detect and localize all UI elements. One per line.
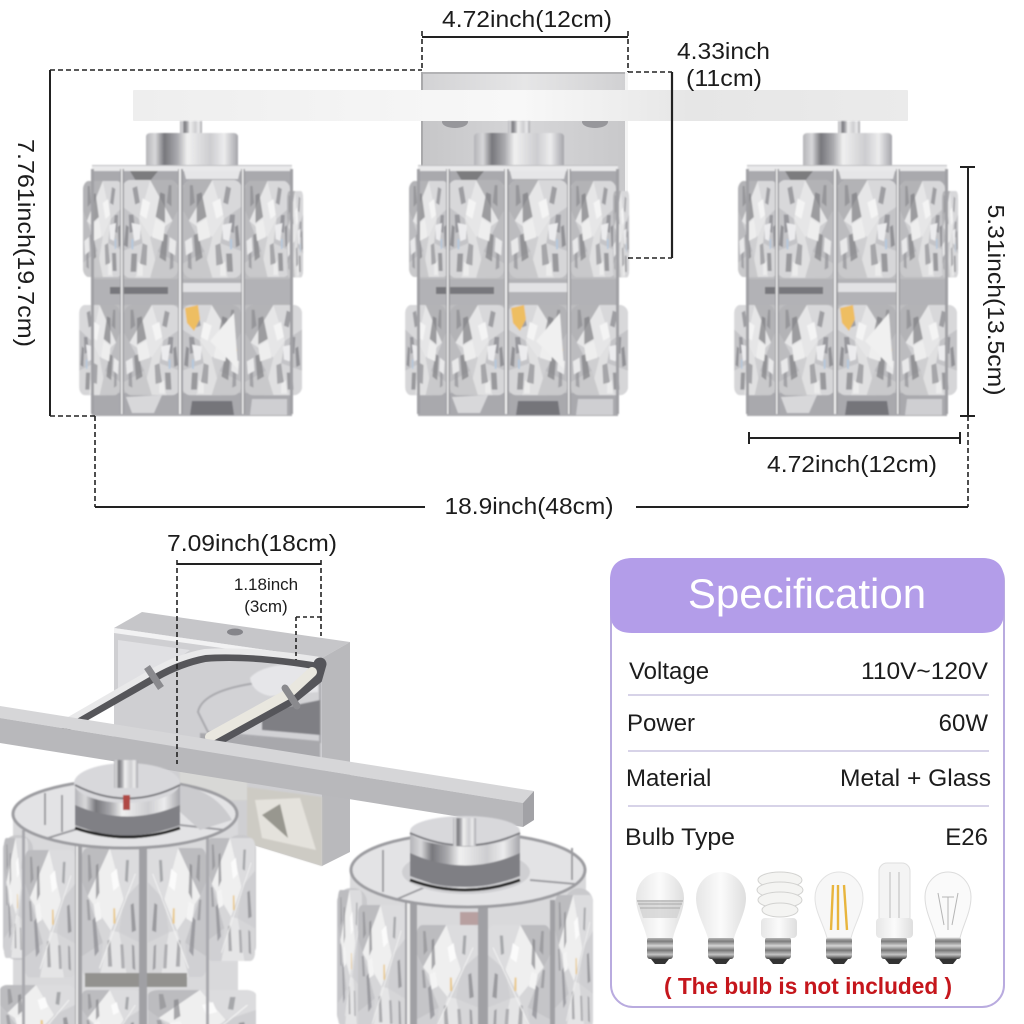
panel: specification (610, 558, 1004, 1007)
heading: Specification (688, 570, 926, 617)
dimension: plate width 4.72inch (422, 6, 628, 72)
long square bar (0, 706, 534, 827)
icon: LED bulb with fins (636, 872, 684, 964)
row: power (627, 710, 988, 737)
note: bulb not included: ( The bulb is not included ) (664, 973, 952, 999)
panel header (610, 558, 1004, 633)
dimension: total height 7.761inch: 7.761inch(19.7cm) (13, 139, 39, 347)
dimension: 1.18inch offset (234, 575, 321, 660)
dimension: total width 18.9inch (50, 416, 968, 519)
right shade (734, 121, 958, 416)
left shade rim (13, 780, 237, 848)
dimension: shade width 4.72inch: 4.72inch(12cm) (767, 451, 937, 477)
top fixture: three-light crystal vanity front view (79, 72, 958, 416)
dimension: depth 7.09inch: 7.09inch(18cm) (167, 530, 337, 556)
left shade (79, 121, 303, 416)
dimension: 1.18inch offset: 1.18inch (234, 575, 298, 594)
icon: filament bulb (815, 872, 863, 964)
icon: incandescent bulb (925, 872, 971, 964)
row: power: 60W (939, 710, 988, 737)
right shade crystal body (337, 870, 593, 1024)
right shade cap (410, 816, 520, 890)
bottom fixture: angled close-up (0, 612, 593, 1024)
dimension: total width 18.9inch: 18.9inch(48cm) (444, 493, 614, 519)
left chrome arm (62, 651, 320, 728)
dimension: depth 7.09inch (167, 530, 337, 764)
wall plate (114, 612, 350, 866)
middle shade (405, 121, 629, 416)
right chrome arm (210, 664, 320, 742)
right shade rim (351, 833, 585, 907)
white horizontal bar (133, 90, 908, 121)
row: voltage: 110V~120V (861, 658, 988, 685)
left close-up shade (0, 760, 256, 1024)
mounting backplate (421, 72, 628, 260)
icon: U-tube CFL bulb (876, 863, 913, 964)
dimension: shade height 5.31inch (960, 167, 1009, 416)
panel outline (611, 559, 1004, 1007)
reflected shade behind plate (180, 664, 322, 866)
row: power: Power (627, 710, 695, 737)
dimension: 1.18inch offset: (3cm) (244, 597, 288, 616)
left shade crystal body (0, 815, 256, 1024)
row: voltage (629, 658, 988, 685)
right close-up shade (337, 816, 593, 1024)
row: bulb type: E26 (945, 824, 988, 851)
dimension: plate height 4.33inch: 4.33inch (677, 38, 770, 64)
dimension: plate height 4.33inch (628, 38, 770, 258)
dimension: shade width 4.72inch (749, 432, 960, 477)
row: bulb type (625, 824, 988, 851)
row: bulb type: Bulb Type (625, 824, 735, 851)
dimension: plate height 4.33inch: (11cm) (686, 65, 762, 91)
row: material: Material (626, 765, 711, 792)
row: voltage: Voltage (629, 658, 709, 685)
dimension: shade height 5.31inch: 5.31inch(13.5cm) (983, 204, 1009, 396)
left shade cap (74, 760, 180, 837)
row: material (626, 765, 991, 792)
row: material: Metal + Glass (840, 765, 991, 792)
icon: frosted bulb (696, 872, 746, 964)
dimension: plate width 4.72inch: 4.72inch(12cm) (442, 6, 612, 32)
icon: spiral CFL bulb (757, 872, 803, 964)
